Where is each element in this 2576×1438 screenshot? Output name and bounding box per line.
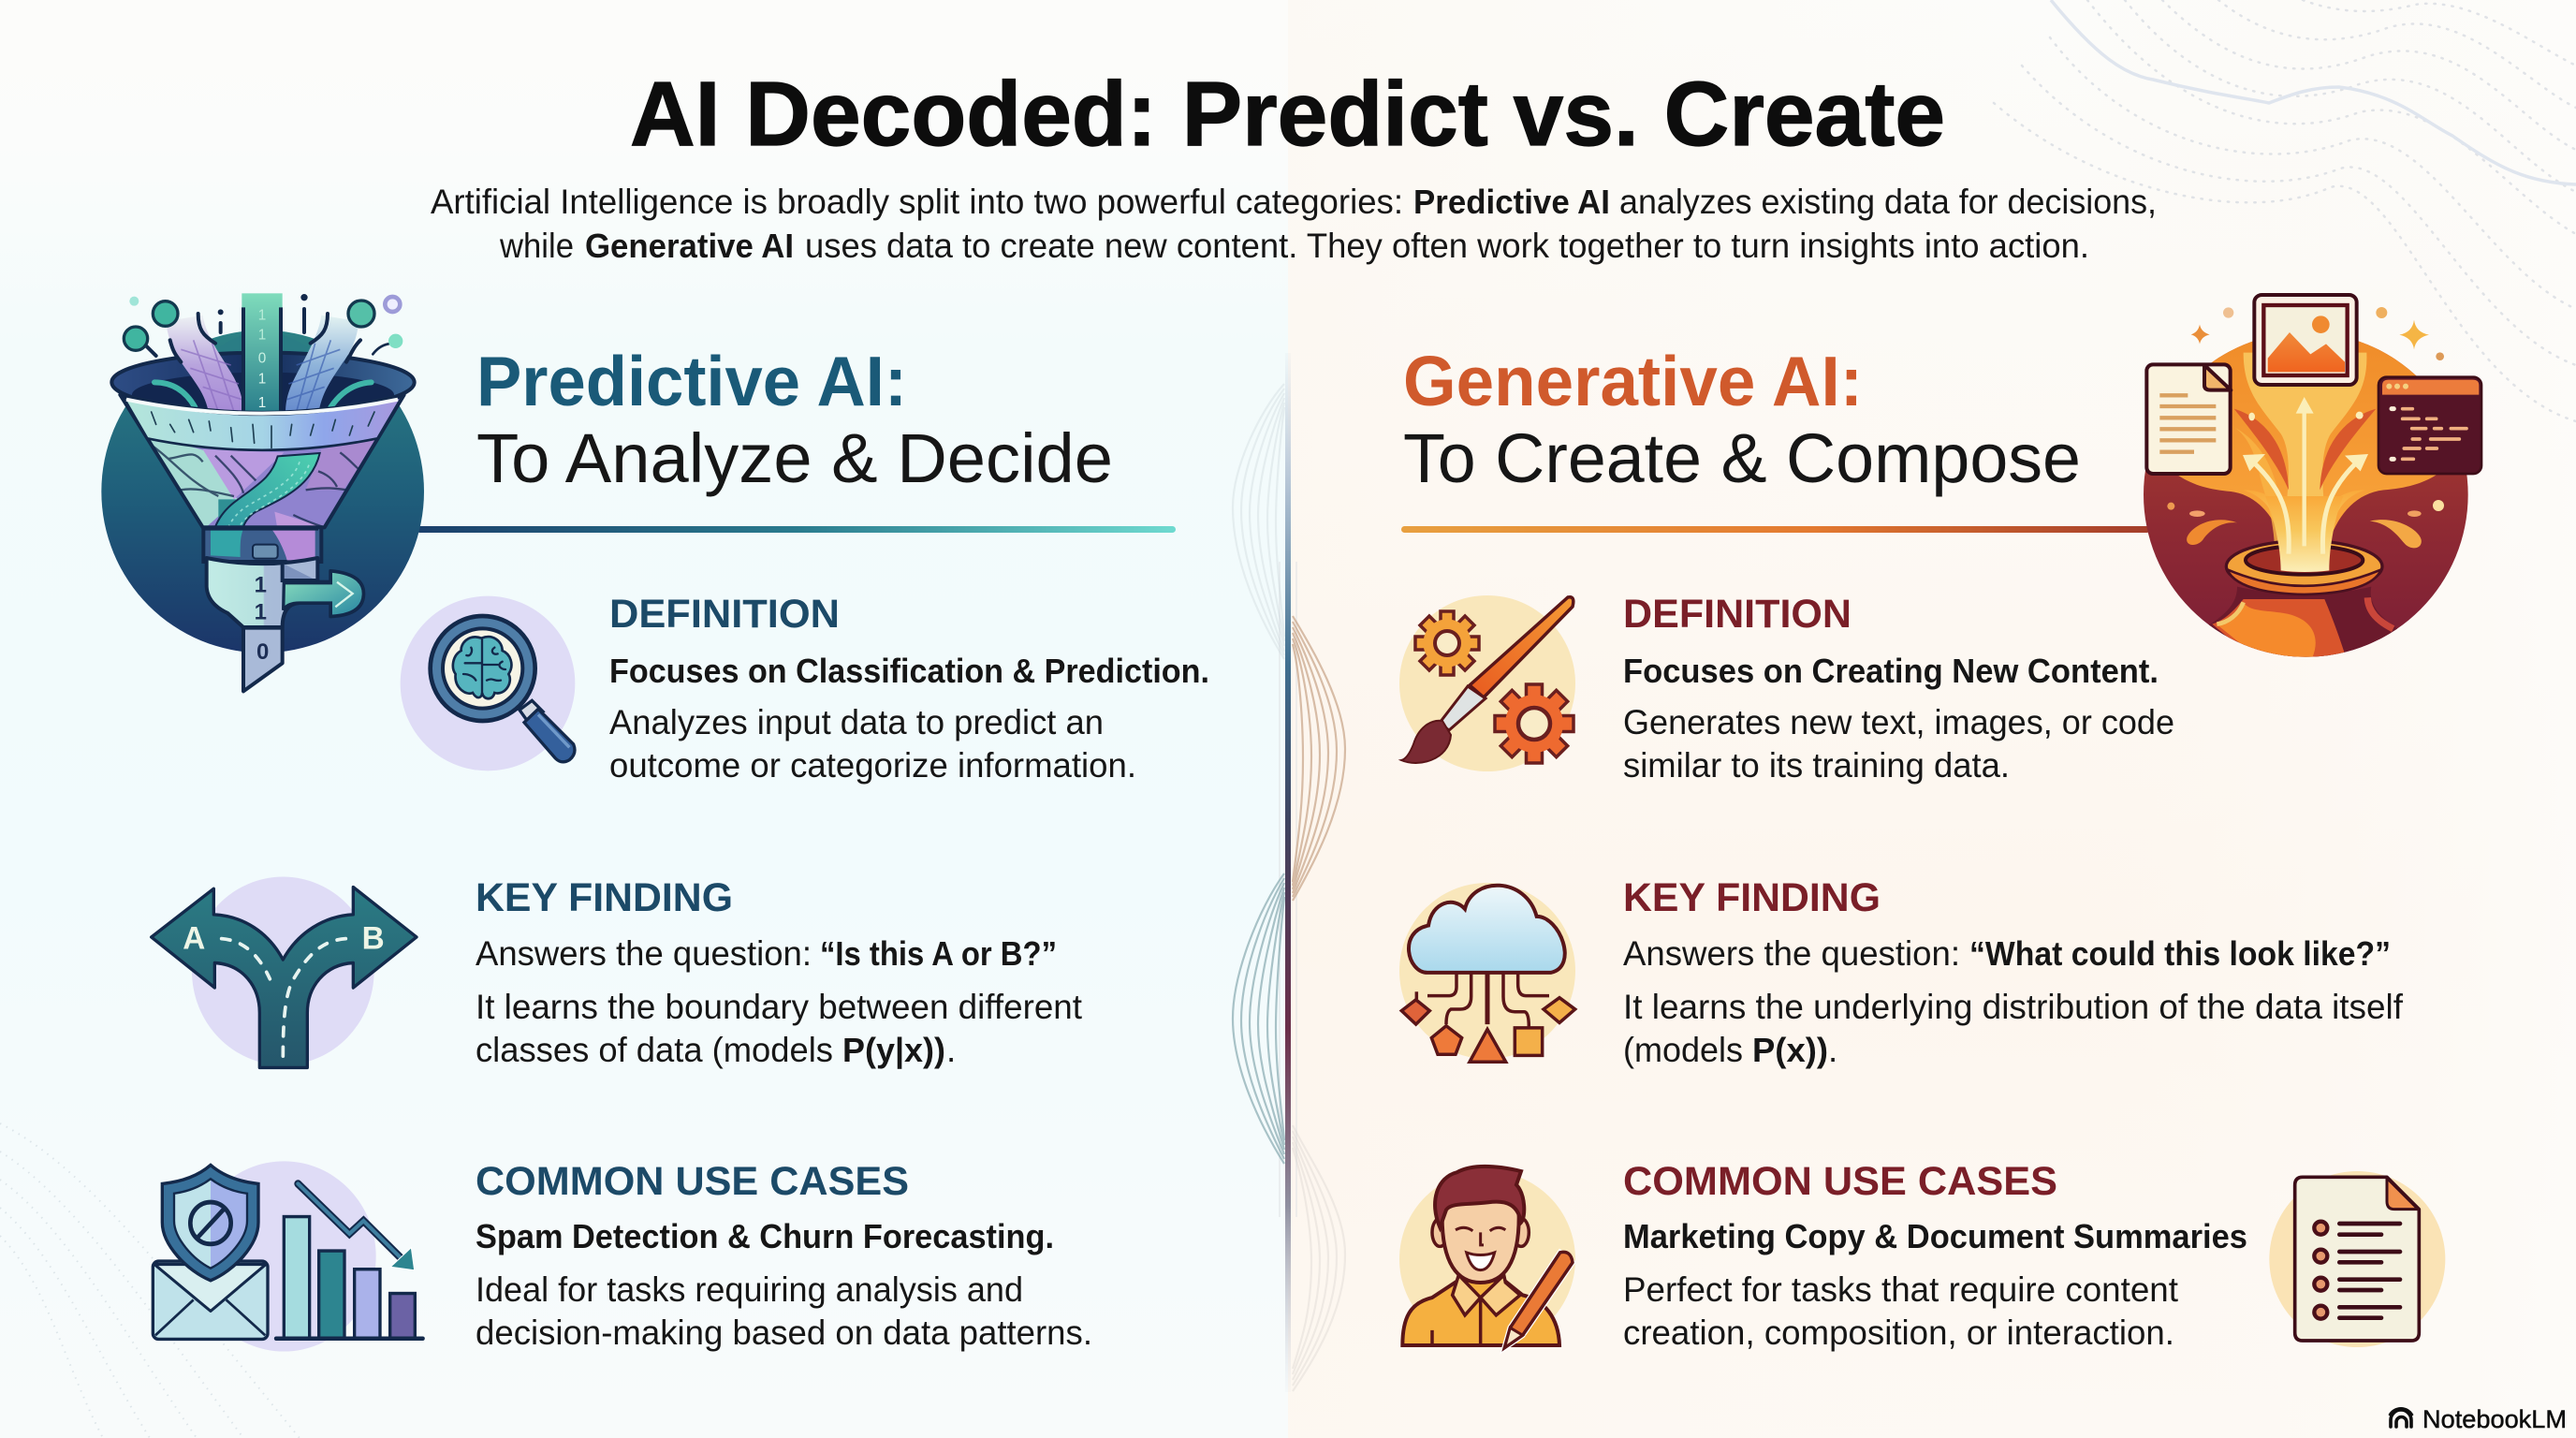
use cases text: Perfect for tasks that require content [1623,1270,2179,1309]
intro text: uses data to create new content. They often work together to turn insights into action. [805,227,2089,265]
key finding text [476,875,1083,1070]
key finding text: classes of data (models [476,1031,833,1069]
key finding text: It learns the underlying distribution of the data itself [1623,988,2404,1026]
definition text [609,592,1209,785]
key finding text: “Is this A or B?” [820,934,1057,973]
code card [2378,377,2481,474]
key finding text: P(x)) [1752,1031,1828,1069]
icon: cloud generating shapes [1399,883,1575,1062]
icon: data funnel: 1 [258,395,266,411]
generative heading rule [1401,526,2150,533]
use cases text: Spam Detection & Churn Forecasting. [476,1217,1054,1255]
use cases text: Marketing Copy & Document Summaries [1623,1217,2247,1255]
gear large [1495,684,1573,763]
icon: data funnel [101,293,424,691]
use cases text: COMMON USE CASES [476,1159,909,1204]
panel: generative AI [1399,295,2481,1352]
definition text: similar to its training data. [1623,746,2010,785]
predictive heading: To Analyze & Decide [476,419,1113,497]
panel: predictive AI [101,293,1209,1352]
intro text [431,183,2157,265]
definition text: DEFINITION [609,592,840,637]
generative heading: To Create & Compose [1403,419,2081,497]
use cases text: creation, composition, or interaction. [1623,1313,2174,1352]
icon: paintbrush and gears [1399,595,1575,771]
use cases text: COMMON USE CASES [1623,1159,2057,1204]
key finding text: . [1828,1031,1837,1069]
icon: data funnel: 1 [255,600,267,625]
icon: data funnel: 1 [258,328,266,344]
icon: magnifier with brain [401,596,575,770]
intro text: analyzes existing data for decisions, [1619,183,2157,221]
NotebookLM logo: NotebookLM [2422,1405,2567,1433]
definition text: outcome or categorize information. [609,746,1136,785]
definition text: Focuses on Creating New Content. [1623,652,2159,690]
icon: summary document [2269,1171,2445,1347]
key finding text [1623,875,2404,1069]
generative heading: Generative AI: [1403,342,1863,420]
title: AI Decoded: Predict vs. Create [630,63,1945,165]
icon: creative pot [2144,295,2481,677]
generative heading [1403,342,2081,497]
predictive heading rule [417,526,1176,533]
funnel cone [151,440,374,526]
key finding text: P(y|x)) [842,1031,945,1070]
icon: data funnel: 0 [258,350,266,366]
key finding text: KEY FINDING [476,875,733,920]
use cases text: Ideal for tasks requiring analysis and [476,1270,1023,1309]
key finding text: Answers the question: [476,934,812,973]
intro text: while [499,227,574,265]
definition text: DEFINITION [1623,592,1852,637]
doc card [2146,364,2231,474]
definition text: Analyzes input data to predict an [609,703,1104,741]
icon: fork in road: A [183,920,205,957]
use cases text [1623,1159,2247,1352]
predictive heading [476,342,1113,497]
use cases text: decision-making based on data patterns. [476,1313,1092,1352]
icon: data funnel: 0 [256,639,269,665]
intro text: Artificial Intelligence is broadly split into two powerful categories: [431,183,1403,221]
predictive heading: Predictive AI: [476,342,907,420]
icon: data funnel: 1 [258,371,266,387]
icon: fork in road [152,877,417,1067]
definition text [1623,592,2174,785]
icon: data funnel: 1 [258,308,266,324]
image card [2254,295,2357,385]
definition text: Focuses on Classification & Prediction. [609,652,1209,690]
key finding text: “What could this look like?” [1969,934,2391,973]
use cases text [476,1159,1092,1352]
key finding text: KEY FINDING [1623,875,1881,920]
icon: spam shield and declining bars [153,1161,423,1352]
intro text: Generative AI [585,227,794,265]
center divider with waves [1233,353,1345,1392]
key finding text: It learns the boundary between different [476,988,1083,1026]
key finding text: Answers the question: [1623,934,1960,973]
icon: person with pen [1399,1167,1575,1348]
intro text: Predictive AI [1413,183,1610,221]
gear small [1415,611,1479,675]
definition text: Generates new text, images, or code [1623,703,2174,741]
key finding text: (models [1623,1031,1743,1069]
key finding text: . [946,1031,956,1069]
icon: data funnel: 1 [255,573,267,598]
icon: fork in road: B [362,920,385,957]
